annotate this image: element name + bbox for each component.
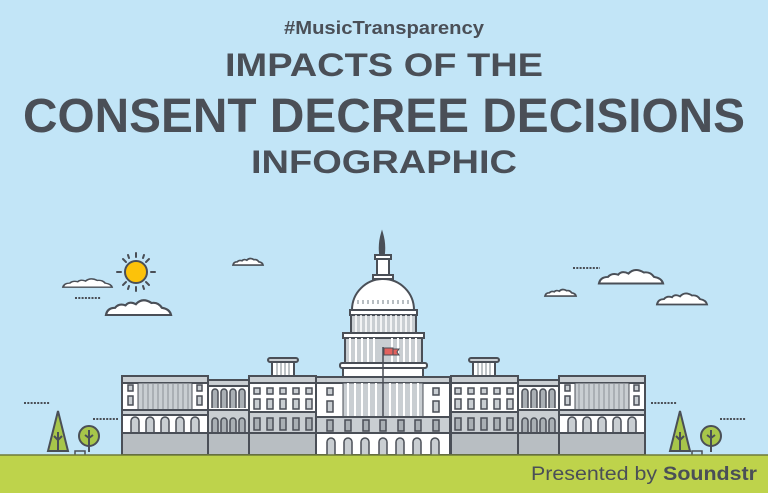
wind dashes: [24, 268, 746, 419]
icon: sun: [117, 253, 155, 291]
title line 3: INFOGRAPHIC: [251, 144, 517, 180]
clouds: [63, 258, 707, 315]
trees left: [48, 411, 99, 455]
hashtag: #MusicTransparency: [284, 18, 484, 38]
center block: [316, 377, 450, 455]
trees right: [670, 411, 721, 455]
right wings: [451, 358, 645, 455]
capitol building: [122, 233, 645, 455]
dome: [340, 233, 427, 377]
left wings: [122, 358, 316, 455]
footer credit: Presented by Soundstr: [531, 464, 758, 485]
title line 1: IMPACTS OF THE: [225, 47, 543, 83]
flag: [382, 347, 384, 417]
ground: [0, 455, 768, 493]
title line 2: CONSENT DECREE DECISIONS: [23, 90, 745, 143]
